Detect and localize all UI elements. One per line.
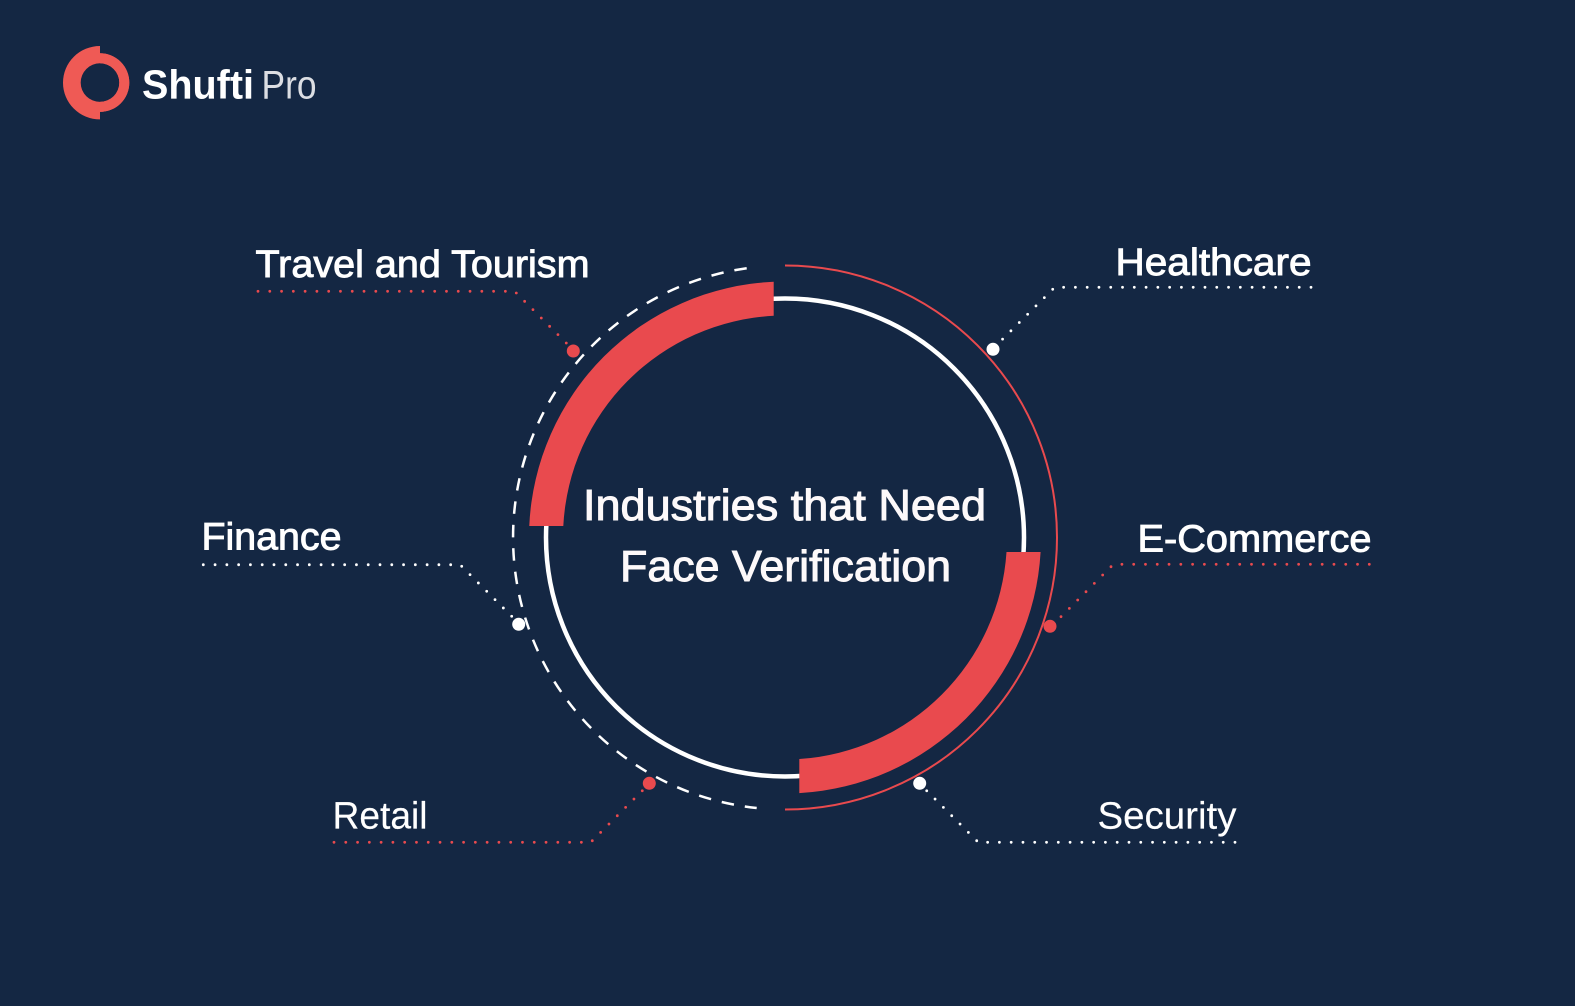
- dotted leader: [1063, 286, 1311, 289]
- callout: Security: [913, 777, 1236, 842]
- dotted leader diagonal: [1061, 567, 1111, 617]
- white dashed outer arc: [513, 268, 757, 808]
- logo wordmark: Shufti: Shufti: [142, 61, 254, 107]
- dotted leader: [1121, 563, 1369, 566]
- label: Security: [1098, 795, 1236, 837]
- thin red outer arc: [785, 266, 1057, 810]
- dotted leader: [203, 563, 451, 566]
- dot: [1044, 620, 1056, 633]
- label: Travel and Tourism: [256, 244, 590, 286]
- callout: Healthcare: [986, 242, 1312, 356]
- title line 1: Industries that Need: [583, 481, 986, 530]
- dot: [913, 777, 926, 790]
- callout: Travel and Tourism: [256, 244, 590, 358]
- dotted leader: [334, 841, 582, 844]
- logo wordmark: Pro: Pro: [262, 63, 316, 107]
- dot: [512, 618, 525, 631]
- callout: E-Commerce: [1044, 518, 1372, 633]
- callout: Retail: [332, 777, 656, 842]
- dotted leader: [987, 841, 1235, 844]
- thick red arc lower right: [799, 552, 1041, 793]
- dotted leader diagonal: [592, 790, 643, 841]
- dot: [643, 777, 656, 790]
- dotted leader diagonal: [926, 790, 977, 841]
- callout: Finance: [202, 516, 525, 631]
- label: Finance: [202, 516, 342, 558]
- label: Healthcare: [1116, 242, 1312, 284]
- dot: [567, 344, 580, 358]
- label: Retail: [332, 795, 428, 837]
- title line 2: Face Verification: [620, 542, 951, 591]
- dotted leader diagonal: [462, 566, 512, 617]
- dotted leader: [258, 290, 506, 293]
- logo: Shufti Pro: [63, 46, 317, 119]
- white inner ring: [546, 298, 1024, 776]
- dot: [986, 343, 1000, 356]
- dotted leader diagonal: [1002, 289, 1053, 339]
- logo ring right half: [100, 53, 129, 112]
- central ring diagram: [513, 266, 1057, 810]
- dotted leader diagonal: [516, 293, 567, 343]
- label: E-Commerce: [1138, 518, 1372, 560]
- title: [583, 481, 986, 591]
- thick red arc upper left: [529, 282, 774, 526]
- icon: logo ring: [63, 46, 129, 119]
